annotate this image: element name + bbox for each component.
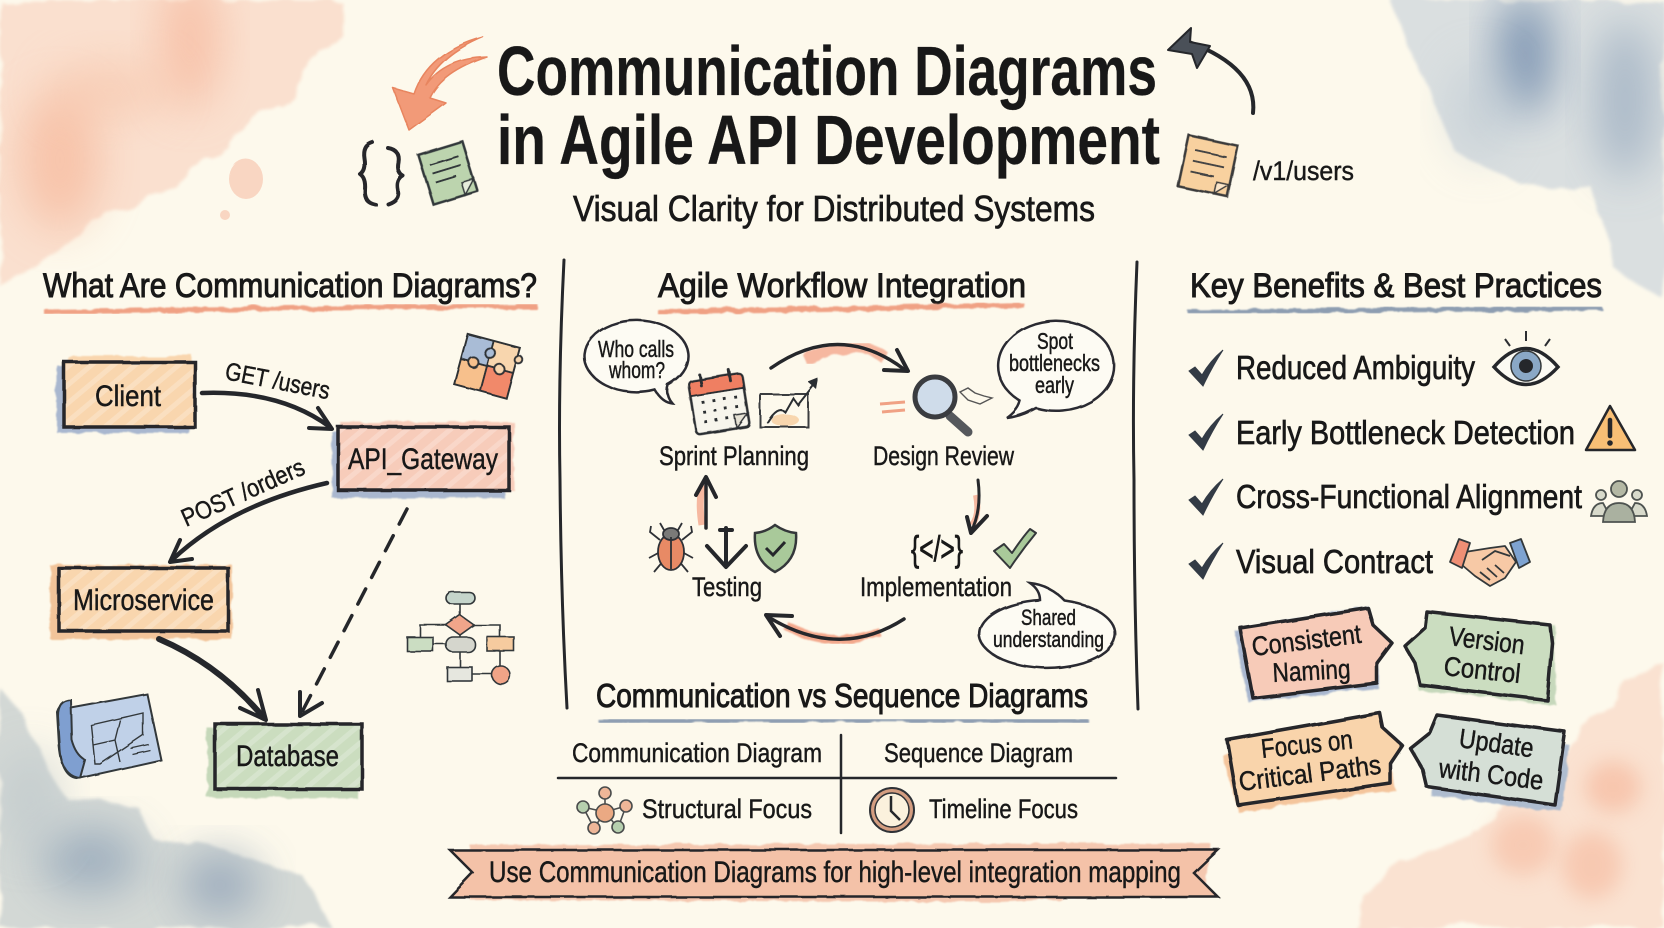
- icon: flowchart: [407, 592, 514, 684]
- icon: curly braces: [360, 142, 403, 205]
- heading: what are: What Are Communication Diagrams?: [43, 267, 537, 305]
- icon: network: [577, 787, 632, 834]
- tag: version control: [1405, 612, 1556, 705]
- arrow: microservice to database: [159, 639, 266, 720]
- bubble: spot bottlenecks early: Spot: [1037, 328, 1073, 354]
- watercolour wash: bottom right: [1350, 663, 1664, 928]
- panel: key benefits: [1187, 267, 1647, 812]
- node: database: Database: [236, 740, 339, 773]
- label: implementation: Implementation: [860, 572, 1012, 602]
- node: database: [207, 724, 362, 798]
- bubble: who calls whom: whom?: [608, 357, 665, 383]
- watercolour wash: top left: [0, 0, 340, 287]
- node: client: Client: [95, 380, 162, 413]
- label: post orders: POST /orders: [177, 453, 309, 532]
- arrow: post orders: [170, 483, 327, 562]
- watercolour wash: bottom left: [0, 688, 332, 928]
- icon: warning: [1586, 406, 1635, 450]
- icon: code braces: {</>}: [911, 528, 963, 569]
- tag: version control: Control: [1442, 651, 1522, 689]
- arrow: testing to planning: [696, 477, 716, 528]
- tag: consistent naming: Naming: [1272, 654, 1351, 688]
- bubble: shared understanding: [979, 583, 1115, 668]
- banner: Use Communication Diagrams for high-level integration mapping: [489, 856, 1181, 889]
- arrow: implementation to testing: [766, 615, 904, 640]
- tag: update with code: Update: [1457, 723, 1536, 763]
- icon: bug: [649, 523, 693, 572]
- arrow: planning to review: [771, 344, 908, 371]
- bubble: shared understanding: understanding: [993, 627, 1104, 652]
- divider left: [560, 260, 567, 708]
- icon: down arrow: [707, 528, 746, 567]
- banner: [450, 843, 1218, 902]
- heading underline: [1187, 308, 1603, 312]
- bubble: who calls whom: Who calls: [598, 336, 674, 362]
- arrow: review to implementation: [967, 480, 987, 533]
- title: Communication Diagrams: [497, 32, 1157, 110]
- tag: consistent naming: Consistent: [1250, 619, 1363, 662]
- icon: blueprint: [57, 694, 161, 778]
- heading: agile workflow: Agile Workflow Integration: [658, 267, 1026, 305]
- benefit: visual contract: Visual Contract: [1236, 543, 1433, 580]
- node: microservice: [50, 565, 232, 639]
- icon: shield: [755, 525, 796, 572]
- title: in Agile API Development: [497, 101, 1160, 179]
- tag: focus on critical paths: Focus on: [1259, 725, 1354, 764]
- icon: eye: [1494, 331, 1558, 384]
- icon: trend chart: [760, 378, 818, 427]
- heading underline: [658, 305, 1024, 312]
- tag: update with code: [1410, 715, 1570, 812]
- panel: agile workflow: [585, 267, 1115, 668]
- icon: clock: [870, 788, 914, 832]
- label: /v1/users: /v1/users: [1253, 156, 1354, 186]
- label: design review: Design Review: [873, 441, 1014, 471]
- node: api gateway: API_Gateway: [348, 443, 498, 476]
- decorative splash: [220, 159, 263, 220]
- node: api gateway: [332, 422, 514, 498]
- icon: green check: [994, 529, 1036, 568]
- bubble: shared understanding: Shared: [1021, 605, 1076, 630]
- table header: communication: Communication Diagram: [572, 738, 822, 768]
- icon: handshake: [1450, 539, 1530, 586]
- tag: consistent naming: [1234, 606, 1392, 702]
- node: microservice: Microservice: [73, 584, 214, 617]
- icon: people: [1591, 481, 1647, 522]
- tag: update with code: with Code: [1436, 753, 1545, 796]
- icon: magnifier: [880, 377, 992, 432]
- panel: communication vs sequence: [558, 677, 1116, 834]
- heading underline: [598, 720, 1088, 722]
- table header: sequence: Sequence Diagram: [884, 738, 1073, 768]
- icon: green note: [418, 141, 478, 205]
- heading: comparison: Communication vs Sequence Diagrams: [596, 677, 1088, 714]
- benefit: cross-functional alignment: Cross-Functional Alignment: [1236, 478, 1582, 515]
- arrow: dark title arrow: [1168, 28, 1253, 113]
- title: [497, 32, 1160, 179]
- label: sprint planning: Sprint Planning: [659, 441, 809, 471]
- subtitle: Visual Clarity for Distributed Systems: [573, 188, 1095, 229]
- tag: focus on critical paths: [1222, 712, 1402, 812]
- bubble: spot bottlenecks early: bottlenecks: [1009, 350, 1100, 376]
- icon: calendar: [687, 368, 750, 435]
- label: get users: GET /users: [223, 357, 332, 405]
- tag: version control: Version: [1447, 621, 1526, 660]
- node: client: [57, 356, 195, 433]
- arrow: dashed gateway to database: [300, 509, 407, 716]
- label: structural focus: Structural Focus: [642, 794, 812, 824]
- icon: puzzle: [454, 334, 526, 400]
- bubble: spot bottlenecks early: [998, 321, 1114, 418]
- heading underline: [44, 306, 537, 312]
- benefit: early bottleneck detection: Early Bottleneck Detection: [1236, 414, 1575, 451]
- bubble: who calls whom: [585, 320, 689, 403]
- divider right: [1133, 262, 1138, 709]
- watercolour wash: top right: [1390, 0, 1664, 300]
- bubble: spot bottlenecks early: early: [1035, 372, 1074, 398]
- label: timeline focus: Timeline Focus: [929, 794, 1078, 824]
- heading: key benefits: Key Benefits & Best Practices: [1190, 267, 1602, 305]
- tag: focus on critical paths: Critical Paths: [1237, 750, 1383, 797]
- arrow: orange title arrow: [393, 37, 487, 130]
- benefit: reduced ambiguity: Reduced Ambiguity: [1236, 349, 1475, 386]
- label: testing: Testing: [692, 572, 762, 602]
- panel: what are communication diagrams: [43, 267, 537, 798]
- arrow: get users: [202, 393, 332, 429]
- icon: orange note: [1178, 135, 1238, 197]
